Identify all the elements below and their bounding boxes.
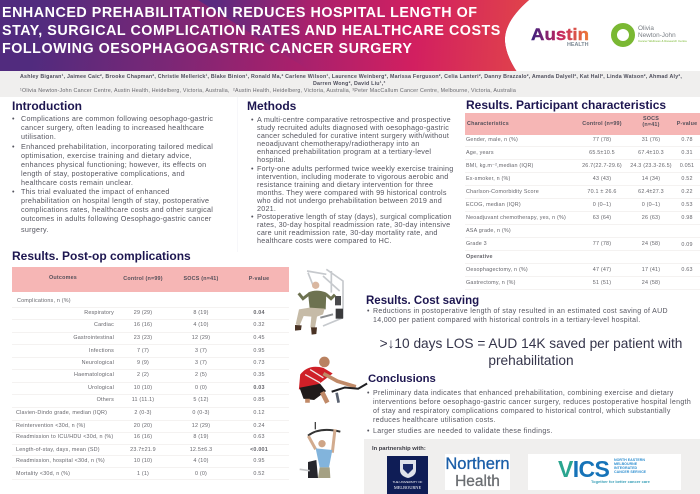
- table: participant characteristics: 0.09: [681, 242, 693, 248]
- heading: post-op complications: Results. Post-op complications: [12, 249, 191, 263]
- table: post-op complications: Readmission to ICU/HDU <30d, n (%): [16, 434, 113, 440]
- table: post-op complications: 12 (29): [192, 423, 210, 429]
- table: post-op complications: 10 (10): [134, 458, 152, 464]
- table: participant characteristics: BMI, kg.m⁻²,median (IQR): [466, 163, 534, 169]
- panel: introduction: [12, 99, 213, 234]
- table: post-op complications: 8 (19): [193, 310, 209, 316]
- table: post-op complications: 8 (19): [193, 434, 209, 440]
- table: post-op complications: Others: [97, 397, 114, 403]
- table: participant characteristics: Operative: [466, 254, 493, 260]
- table: post-op complications: Haematological: [74, 372, 114, 378]
- table: post-op complications: 0.35: [253, 372, 265, 378]
- table: participant characteristics: 0 (0–1): [593, 202, 611, 208]
- table: post-op complications: 1 (1): [137, 471, 149, 477]
- table: participant characteristics: 62.4±27.3: [638, 189, 664, 195]
- table: post-op complications: 4 (10): [193, 322, 209, 328]
- table: post-op complications: 0.12: [253, 410, 265, 416]
- text: methods bullets: Postoperative length of stay (days), surgical complication: [257, 212, 452, 221]
- table: participant characteristics: 0 (0–1): [642, 202, 660, 208]
- table: post-op complications: Neurological: [82, 360, 114, 366]
- table: participant characteristics: ASA grade, n (%): [466, 228, 511, 234]
- callout: 14K saved: [380, 336, 682, 368]
- table: participant characteristics: 24.3 (23.3-26.5): [630, 163, 672, 169]
- table header: Outcomes: [49, 275, 77, 281]
- table: post-op complications: 7 (7): [137, 348, 149, 354]
- text: introduction bullets: Enhanced prehabilitation, incorporating tailored medical: [21, 142, 213, 151]
- table: post-op complications: 5 (12): [193, 397, 209, 403]
- table header: Characteristics: [467, 121, 509, 127]
- table: participant characteristics: Oesophagectomy, n (%): [466, 267, 528, 273]
- text: introduction bullets: complications rates, healthcare costs and other surgical: [21, 205, 213, 214]
- logo: Austin Health: HEALTH: [567, 42, 588, 48]
- table: post-op complications: 0 (0): [195, 385, 207, 391]
- table: post-op complications: 0.85: [253, 397, 265, 403]
- table: post-op complications: 0 (0): [195, 471, 207, 477]
- table: post-op complications: 10 (10): [134, 385, 152, 391]
- heading: cost saving: Results. Cost saving: [366, 294, 479, 306]
- logo: VICS: CANCER SERVICE: [614, 470, 646, 474]
- table: post-op complications: 0.95: [253, 348, 265, 354]
- table: post-op complications: 0.32: [253, 322, 265, 328]
- table: post-op complications: Mortality <30d, n (%): [16, 471, 70, 477]
- table: participant characteristics: Charlson-Comorbidity Score: [466, 189, 539, 195]
- logo: Northern Health: Northern: [445, 455, 510, 473]
- table: participant characteristics: 0.98: [681, 215, 693, 221]
- logo: VICS: NORTH EASTERN: [614, 458, 645, 462]
- text: conclusions bullets: Larger studies are needed to validate these findings.: [373, 428, 553, 435]
- image: man on resistance machine: [295, 268, 344, 335]
- text: introduction bullets: This trial evaluated the impact of enhanced: [21, 187, 170, 196]
- text: methods bullets: •: [251, 115, 254, 124]
- table: post-op complications: 2 (2): [137, 372, 149, 378]
- table: participant characteristics: 0.31: [681, 150, 693, 156]
- text: methods bullets: •: [251, 212, 254, 221]
- authors and affiliations band: Ashley Bigaran¹, Jaimee Caic², Brooke Chapman², Christie Mellerick¹, Blake Binion¹, Ronald Ma,² Carlene Wilson¹, Laurence Weinberg², Marissa Ferguson², Celia Lanteri², Danny Brazzalo², Amanda Dalyell², Kat Hall², Linda Watson², Ahmad Aly²,: [20, 74, 682, 80]
- table: post-op complications: 20 (20): [134, 423, 152, 429]
- text: cost saving bullet: 14,000 per patient compared with historical controls in a tertiary-level hospital.: [373, 317, 640, 324]
- table: participant characteristics: 0.78: [681, 137, 693, 143]
- logo: VICS: VICS: [558, 456, 609, 482]
- table: participant characteristics: 24 (58): [642, 280, 660, 286]
- table: post-op complications: 0.63: [253, 434, 265, 440]
- panel: conclusions: [367, 373, 691, 435]
- logo: Northern Health: Health: [455, 473, 500, 490]
- callout: 14K saved: prehabilitation: [488, 353, 574, 368]
- table: post-op complications: 0.73: [253, 360, 265, 366]
- text: introduction bullets: length of stay, postoperative complications, and: [21, 169, 185, 178]
- table: post-op complications: 0.45: [253, 335, 265, 341]
- text: in partnership with: In partnership with:: [372, 446, 426, 452]
- text: methods bullets: healthcare costs were compared to HC.: [257, 236, 392, 245]
- table: post-op complications: 11 (11.1): [132, 397, 154, 403]
- table: post-op complications: 3 (7): [195, 348, 207, 354]
- text: conclusions bullets: •: [367, 390, 370, 397]
- table header: [465, 113, 700, 135]
- logo: VICS: Together for better cancer care: [591, 479, 650, 484]
- text: introduction bullets: surgery.: [21, 225, 49, 234]
- table: participant characteristics: 0.22: [681, 189, 693, 195]
- text: methods bullets: care unit readmission rate, 30-day mortality rate, and: [257, 228, 438, 237]
- text: methods bullets: rates, 30-day hospital readmission rate, 30-day intensive: [257, 220, 450, 229]
- logo: Olivia Newton-John: Olivia: [638, 25, 654, 32]
- heading: introduction: Introduction: [12, 99, 82, 113]
- text: methods bullets: hospital.: [257, 155, 286, 164]
- table: post-op complications: Clavien-Dindo grade, median (IQR): [16, 410, 107, 416]
- text: conclusions bullets: of stay and respiratory complications compared to historical control, which substantially: [373, 408, 671, 415]
- table: participant characteristics: 26 (63): [642, 215, 660, 221]
- logo: Northern Health: [445, 454, 510, 490]
- table: participant characteristics: 63 (64): [593, 215, 611, 221]
- table: post-op complications: 16 (16): [134, 434, 152, 440]
- text: introduction bullets: [12, 114, 213, 234]
- text: introduction bullets: healthcare costs remain unclear.: [21, 178, 133, 187]
- text: introduction bullets: •: [12, 142, 15, 151]
- table: participant characteristics: [465, 113, 700, 290]
- table header: [12, 267, 289, 292]
- text: methods bullets: study recruited adults diagnosed with oesophago-gastric: [257, 123, 449, 132]
- table: post-op complications: 2 (0-3): [134, 410, 152, 416]
- text: methods bullets: Forty-one adults performed twice weekly exercise training: [257, 164, 453, 173]
- table header: P-value: [249, 276, 269, 282]
- heading: participant characteristics: Results. Participant characteristics: [466, 98, 666, 112]
- heading: methods: Methods: [247, 99, 296, 113]
- table: participant characteristics: 17 (41): [642, 267, 660, 273]
- table: participant characteristics: Age, years: [466, 150, 494, 156]
- table header: SOCS: [643, 116, 659, 122]
- text: methods bullets: intervention, including moderate to vigorous aerobic and: [257, 172, 448, 181]
- text: introduction bullets: optimisation, exercise training and dietary advice,: [21, 151, 192, 160]
- authors and affiliations band: [0, 71, 700, 97]
- table: post-op complications: 29 (29): [134, 310, 152, 316]
- table header: Control (n=99): [582, 121, 622, 127]
- text: conclusions bullets: [367, 390, 691, 435]
- text: methods bullets: A multi-centre comparative retrospective and prospective: [257, 115, 451, 124]
- panel: partners: [364, 439, 700, 494]
- logo: VICS: [528, 454, 681, 490]
- table: participant characteristics: Gender, male, n (%): [466, 137, 518, 143]
- text: introduction bullets: •: [12, 187, 15, 196]
- table: participant characteristics: 65.5±10.5: [589, 150, 615, 156]
- logo: University of Melbourne: THE UNIVERSITY OF: [393, 480, 422, 484]
- text: methods bullets: enhanced prehabilitation program at a tertiary-level: [257, 147, 431, 156]
- logo: University of Melbourne: MELBOURNE: [394, 485, 421, 490]
- table header: P-value: [677, 121, 697, 127]
- text: methods bullets: 2021.: [257, 204, 276, 213]
- table: participant characteristics: 70.1 ± 26.6: [587, 189, 617, 195]
- table: participant characteristics: 43 (43): [593, 176, 611, 182]
- table header: Control (n=99): [123, 276, 163, 282]
- text: introduction bullets: cancer surgery, often leading to increased healthcare: [21, 123, 204, 132]
- table: participant characteristics: 0.63: [681, 267, 693, 273]
- table: post-op complications: Complications, n (%): [17, 298, 71, 304]
- text: methods bullets: cancer scheduled for curative intent surgery with/without: [257, 131, 449, 140]
- text: methods bullets: [251, 115, 453, 245]
- table: participant characteristics: 67.4±10.3: [638, 150, 664, 156]
- table: participant characteristics: 0.051: [680, 163, 694, 169]
- table header: SOCS (n=41): [183, 276, 219, 282]
- table: post-op complications: Reintervention <30d, n (%): [16, 423, 85, 429]
- text: methods bullets: who did not undergo prehabilitation between 2019 and: [257, 196, 442, 205]
- table: participant characteristics: 47 (47): [593, 267, 611, 273]
- text: methods bullets: neoadjuvant chemotherapy/radiotherapy into an: [257, 139, 420, 148]
- authors and affiliations band: Darren Wong², David Liu¹,³: [313, 80, 385, 86]
- text: methods bullets: months. They were compared with 99 historical controls: [257, 188, 447, 197]
- table: participant characteristics: 0.53: [681, 202, 693, 208]
- text: introduction bullets: enhances physical functioning; however, its effects on: [21, 160, 206, 169]
- table: participant characteristics: 14 (34): [642, 176, 660, 182]
- logo: Olivia Newton-John: Newton-John: [638, 32, 676, 38]
- table: post-op complications: [12, 267, 289, 480]
- text: cost saving bullet: •: [367, 308, 370, 315]
- logo: VICS: MELBOURNE: [614, 462, 637, 466]
- table: post-op complications: Urological: [88, 385, 114, 391]
- text: methods bullets: •: [251, 164, 254, 173]
- table: participant characteristics: Gastrectomy, n (%): [466, 280, 516, 286]
- text: introduction bullets: utilisation.: [21, 132, 56, 141]
- text: introduction bullets: Complications are common following oesophago-gastric: [21, 114, 213, 123]
- table header: (n=41): [642, 122, 660, 128]
- table: post-op complications: 23.7±21.9: [130, 447, 156, 453]
- table: post-op complications: 2 (5): [195, 372, 207, 378]
- table: post-op complications: 0.03: [253, 385, 265, 391]
- title: ENHANCED PREHABILITATION REDUCES HOSPITAL LENGTH OF: [2, 5, 478, 21]
- table: post-op complications: 9 (9): [137, 360, 149, 366]
- text: conclusions bullets: interventions before oesophago-gastric cancer surgery, reduces postoperative hospital length: [373, 399, 691, 406]
- table: post-op complications: Length-of-stay, days, mean (SD): [16, 447, 100, 453]
- table: post-op complications: 0.95: [253, 458, 265, 464]
- text: introduction bullets: outcomes in adults following Oesophago-gastric cancer: [21, 214, 212, 223]
- table: participant characteristics: 51 (51): [593, 280, 611, 286]
- table: post-op complications: Respiratory: [84, 310, 114, 316]
- table: participant characteristics: Ex-smoker, n (%): [466, 176, 511, 182]
- table: participant characteristics: ECOG, median (IQR): [466, 202, 521, 208]
- title: [2, 5, 501, 57]
- table: participant characteristics: 0.52: [681, 176, 693, 182]
- logo: Olivia Newton-John: Cancer Wellness & Research Centre: [638, 39, 687, 43]
- table: post-op complications: 23 (23): [134, 335, 152, 341]
- header banner: [0, 0, 529, 71]
- text: conclusions bullets: •: [367, 428, 370, 435]
- panel: cost saving: [366, 294, 682, 368]
- text: conclusions bullets: Preliminary data indicates that enhanced prehabilitation, combining exercise and dietary: [373, 390, 674, 397]
- table: post-op complications: Cardiac: [94, 322, 114, 328]
- table: post-op complications: 3 (7): [195, 360, 207, 366]
- table: post-op complications: 0.04: [253, 310, 265, 316]
- callout: 14K saved: >↓10 days LOS = AUD 14K saved per patient with: [380, 336, 682, 351]
- text: conclusions bullets: reduces healthcare utilisation costs.: [373, 417, 496, 424]
- table: post-op complications: 0.52: [253, 471, 265, 477]
- table: post-op complications: <0.001: [250, 447, 268, 453]
- table: participant characteristics: 24 (58): [642, 241, 660, 247]
- table: post-op complications: 12 (29): [192, 335, 210, 341]
- table: post-op complications: 0.24: [253, 423, 265, 429]
- text: methods bullets: resistance training and dietary intervention for three: [257, 180, 433, 189]
- title: FOLLOWING OESOPHAGOGASTRIC CANCER SURGERY: [2, 41, 412, 57]
- text: introduction bullets: prehabilitation on hospital length of stay, postoperative: [21, 196, 209, 205]
- table: post-op complications: 12.5±6.3: [190, 447, 212, 453]
- table: participant characteristics: 77 (78): [593, 241, 611, 247]
- image: man lifting exercise bar: [300, 422, 340, 478]
- table: post-op complications: 16 (16): [134, 322, 152, 328]
- table: post-op complications: 4 (10): [193, 458, 209, 464]
- heading: conclusions: Conclusions: [368, 373, 436, 385]
- authors and affiliations band: ¹Olivia Newton-John Cancer Centre, Austin Health, Heidelberg, Victoria, Australia, ²Austin Health, Heidelberg, Victoria, Australia, ³Peter MacCallum Cancer Centre, Melbourne, Victoria, Australia: [20, 88, 516, 94]
- text: introduction bullets: •: [12, 114, 15, 123]
- text: cost saving bullet: [367, 308, 668, 324]
- table: participant characteristics: 77 (78): [593, 137, 611, 143]
- text: cost saving bullet: Reductions in postoperative length of stay resulted in an estimated cost saving of AUD: [373, 308, 668, 315]
- table: participant characteristics: 31 (76): [642, 137, 660, 143]
- image: man on exercise bike: [298, 356, 368, 404]
- table: post-op complications: Gastrointestinal: [73, 335, 114, 341]
- table: post-op complications: 0 (0-3): [192, 410, 210, 416]
- logo: University of Melbourne: [387, 456, 428, 494]
- table: post-op complications: Infections: [89, 348, 114, 354]
- table: participant characteristics: Grade 3: [466, 241, 487, 247]
- table: participant characteristics: Neoadjuvant chemotherapy, yes, n (%): [466, 215, 566, 221]
- logo: VICS: INTEGRATED: [614, 466, 637, 470]
- logo: Olivia Newton-John: [611, 23, 687, 47]
- panel: methods: [237, 97, 466, 252]
- title: STAY, SURGICAL COMPLICATION RATES AND HEALTHCARE COSTS: [2, 23, 501, 39]
- table: post-op complications: Readmission, hospital <30d, n (%): [16, 458, 105, 464]
- table: participant characteristics: 26.7(22.7-29.6): [582, 163, 622, 169]
